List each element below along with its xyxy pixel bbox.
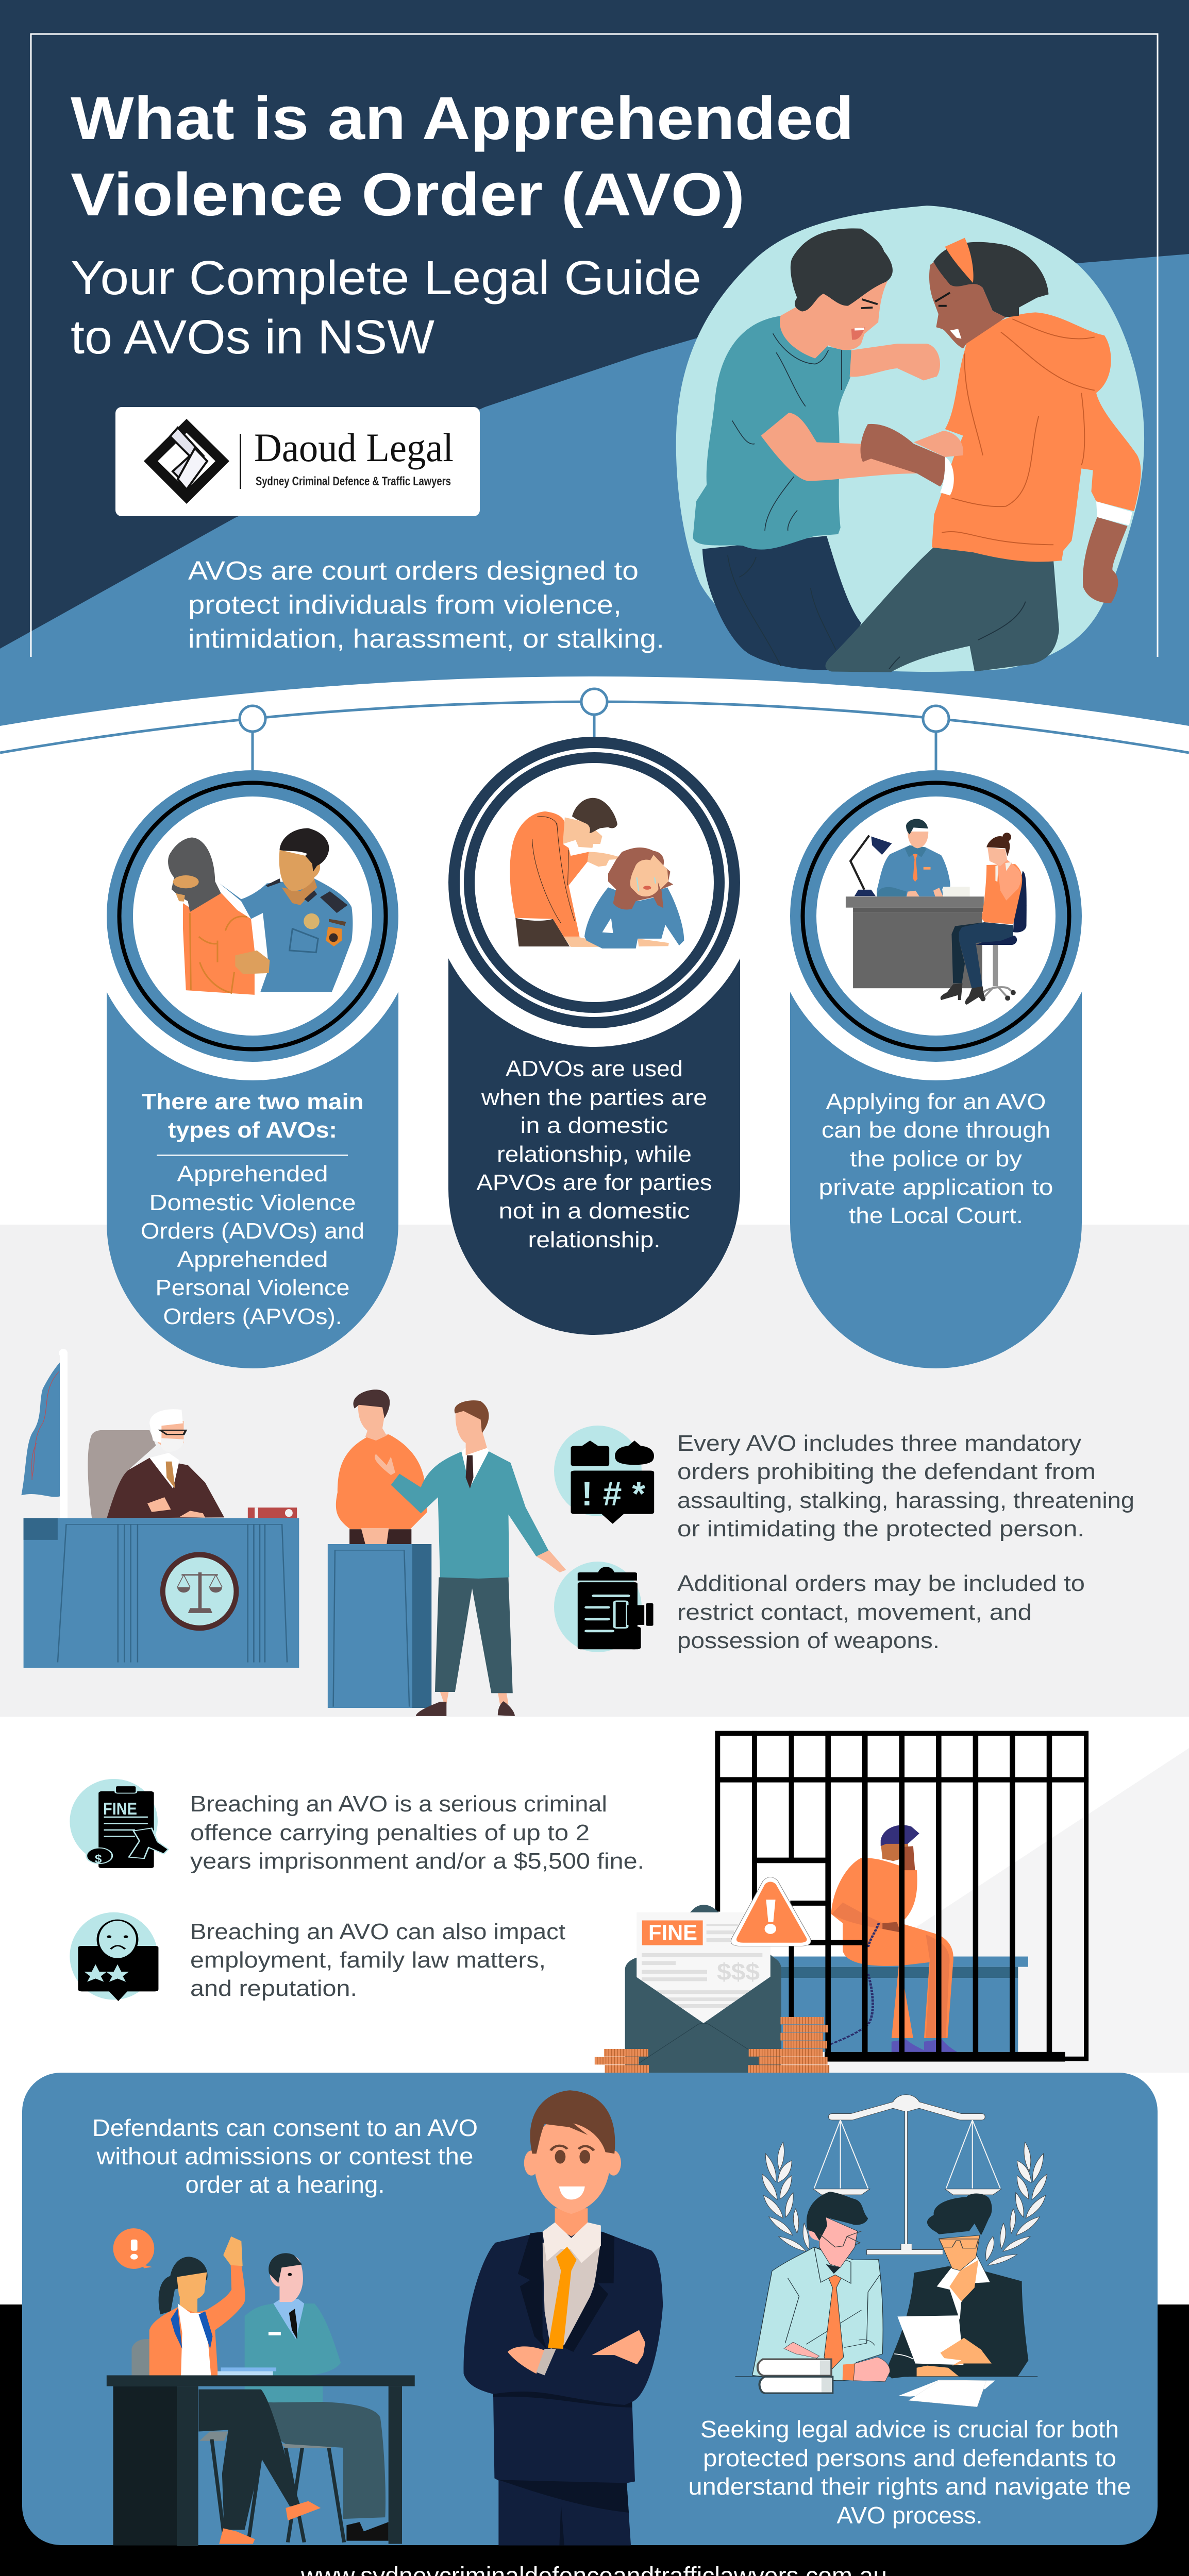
text: defendants can consent: order at a hearing. [186,2171,384,2198]
heading: There are two main [141,1089,364,1114]
text block [141,1161,364,1329]
icon: abusive speech bubble: !#* [581,1475,645,1513]
illustration: woman reporting to police officer [846,819,1027,1005]
text block [818,1089,1053,1228]
logo card [115,407,480,516]
text block: when the parties are [481,1085,707,1110]
subtitle: to AVOs in NSW [71,310,434,364]
text: seeking legal advice [689,2416,1131,2529]
text: breach penalties: Breaching an AVO is a serious criminal [190,1791,607,1817]
text: breach penalties: offence carrying penalties of up to 2 [190,1820,590,1845]
timeline connector with three nodes [0,689,1189,770]
text block: Applying for an AVO [826,1089,1046,1114]
white curved band [0,676,1189,1236]
logo card: Daoud Legal [254,425,454,470]
illustration: scales of justice with two lawyers [735,2095,1047,2407]
text block: Personal Violence [156,1275,349,1300]
icon: abusive speech bubble [554,1426,654,1524]
illustration: smiling lawyer with crossed arms [463,2090,663,2546]
text block: APVOs are for parties [476,1170,712,1195]
hero illustration: two people fighting [676,206,1144,672]
illustration: courtroom judge and defendant [21,1349,566,1716]
text: mandatory orders: orders prohibiting the defendant from [677,1459,1096,1484]
icon: clipboard with gavel [554,1562,654,1652]
text: breach penalties [190,1791,644,1874]
heading [141,1089,364,1156]
illustration: person in jail cell with fine notice: FINE [648,1920,697,1944]
text block: Apprehended [177,1247,328,1272]
header background [0,0,1189,732]
intro text: intimidation, harassment, or stalking. [188,624,664,653]
text block: the police or by [850,1146,1022,1172]
intro text: AVOs are court orders designed to [188,556,639,585]
panel: defendants and legal advice [22,2073,1158,2545]
subtitle: Your Complete Legal Guide [71,251,701,304]
text: seeking legal advice: protected persons and defendants to [703,2445,1116,2471]
text: seeking legal advice: AVO process. [837,2502,982,2529]
icon: fine document: FINE [103,1799,137,1818]
text block: ADVOs are used [506,1056,683,1081]
text block: not in a domestic [499,1198,690,1224]
text block: Orders (APVOs). [163,1304,342,1329]
icon: bad reputation [70,1912,158,2001]
grey diagonal background behind jail [694,1748,1189,2073]
text block [476,1056,712,1252]
text block: can be done through [822,1117,1050,1143]
text: mandatory orders [677,1431,1134,1541]
intro text: protect individuals from violence, [188,590,622,619]
text: defendants can consent: Defendants can consent to an AVO [92,2114,478,2141]
panel: types of AVOs [88,752,417,1368]
panel: ADVOs vs APVOs [430,718,759,1335]
text: other impacts [190,1919,565,2001]
text: additional orders [677,1571,1085,1653]
text: other impacts: and reputation. [190,1976,357,2001]
panel: applying for an AVO [772,752,1100,1368]
illustration: person in jail cell with fine notice: $$$ [717,1958,760,1985]
text: seeking legal advice: Seeking legal advice is crucial for both [700,2416,1119,2443]
text: defendants can consent [92,2114,478,2198]
heading: types of AVOs: [168,1117,337,1143]
title: Violence Order (AVO) [71,161,745,229]
title: What is an Apprehended [71,84,854,152]
text: seeking legal advice: understand their rights and navigate the [689,2473,1131,2500]
text: mandatory orders: or intimidating the protected person. [677,1516,1084,1541]
text block: in a domestic [521,1113,668,1138]
text: additional orders: Additional orders may be included to [677,1571,1085,1596]
text: other impacts: Breaching an AVO can also impact [190,1919,565,1944]
text block: private application to [818,1175,1053,1200]
illustration: officer arresting masked person [168,828,353,995]
text block: Apprehended [177,1161,328,1187]
text: additional orders: restrict contact, movement, and [677,1600,1032,1625]
intro text [188,556,664,653]
text block: the Local Court. [849,1203,1023,1228]
text block: relationship. [528,1227,661,1252]
icon: fine document [70,1779,169,1868]
text block: Orders (ADVOs) and [141,1218,364,1244]
text: breach penalties: years imprisonment and/or a $5,500 fine. [190,1849,644,1874]
illustration: person in jail cell with fine notice [595,1731,1088,2073]
grey section background [0,1225,1189,1717]
subtitle [71,251,701,364]
illustration: man shouting at crying woman [510,798,684,948]
text: mandatory orders: Every AVO includes three mandatory [677,1431,1081,1456]
text block: relationship, while [497,1142,692,1167]
text block: Domestic Violence [149,1190,356,1215]
logo card: Sydney Criminal Defence & Traffic Lawyers [256,474,451,488]
icon: fine document: $ [95,1852,102,1866]
black footer band [0,2304,1189,2576]
title [71,84,854,229]
text: mandatory orders: assaulting, stalking, harassing, threatening [677,1488,1134,1513]
illustration: two people at a desk [107,2228,415,2546]
text: additional orders: possession of weapons. [677,1628,940,1653]
text: defendants can consent: without admissions or contest the [96,2143,474,2170]
text: other impacts: employment, family law matters, [190,1947,546,1973]
